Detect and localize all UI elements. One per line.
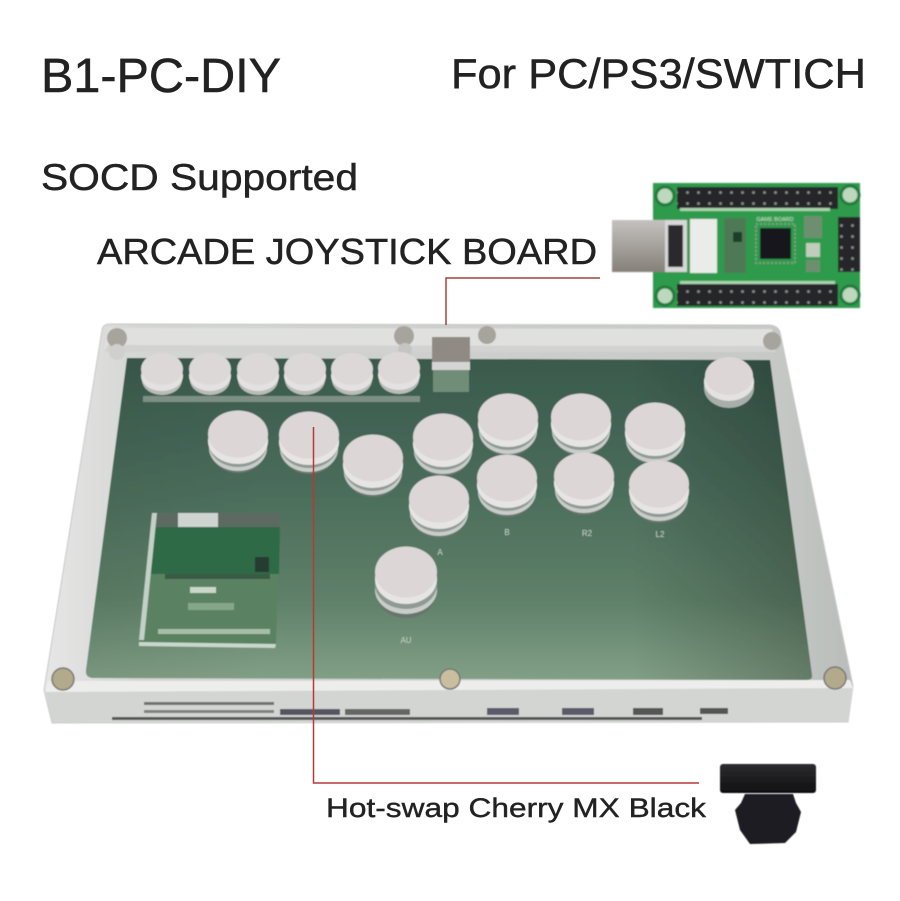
- panel: controller board window: [139, 513, 280, 648]
- button labels: AU: [400, 636, 412, 645]
- heading: platform compatibility: For PC/PS3/SWTICH: [451, 50, 866, 97]
- button labels: B: [504, 528, 510, 537]
- large buttons: [208, 394, 689, 618]
- case front edge: [45, 687, 853, 723]
- text: Arcade joystick board: ARCADE JOYSTICK BOARD: [97, 231, 597, 272]
- panel: green plate: [86, 358, 812, 680]
- title: B1-PC-DIY: B1-PC-DIY: [41, 50, 281, 103]
- arrow: switch leader line: [314, 427, 699, 783]
- button labels: [400, 528, 665, 645]
- icon: arcade joystick board PCB: GAME BOARD: [756, 217, 794, 223]
- top right button: [704, 357, 754, 408]
- front ports: [112, 702, 728, 720]
- button labels: A: [437, 548, 443, 557]
- text: SOCD Supported: SOCD Supported: [41, 157, 358, 198]
- button labels: L2: [656, 530, 665, 539]
- small buttons row: [141, 352, 420, 395]
- arrow: USB board leader line: [446, 278, 600, 325]
- case top strip: [104, 328, 775, 352]
- panel: acrylic case: [44, 324, 853, 723]
- button labels: R2: [582, 529, 593, 538]
- icon: arcade joystick board PCB: [612, 183, 860, 308]
- icon: USB port: [432, 337, 470, 392]
- panel: small button bar: [143, 396, 420, 402]
- photo: arcade controller: [44, 324, 853, 723]
- text: hot-swap switch label: Hot-swap Cherry MX Black: [326, 793, 707, 823]
- icon: corner screws: [52, 326, 846, 690]
- icon: Cherry MX Black switch: [720, 764, 816, 844]
